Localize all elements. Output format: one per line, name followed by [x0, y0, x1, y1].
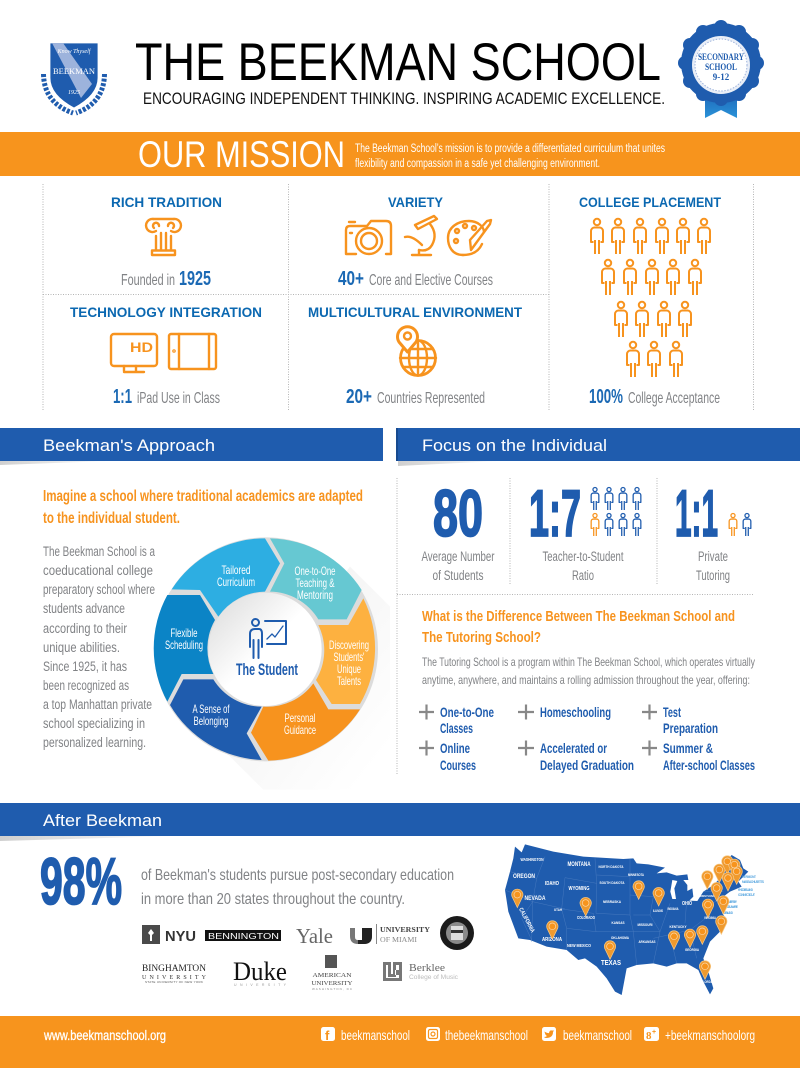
- approach body text: coeducational college: [43, 563, 153, 578]
- state labels: NEBRASKA: [603, 899, 621, 904]
- approach heading: to the individual student.: [43, 510, 180, 527]
- segment: personal guidance: [251, 683, 360, 761]
- state labels: [513, 857, 718, 984]
- panel: rich tradition: 1925: [179, 268, 211, 290]
- social: facebook: f: [325, 1028, 330, 1043]
- approach body text: according to their: [43, 621, 127, 636]
- list of offerings: After-school Classes: [663, 757, 755, 773]
- state labels: ARIZONA: [542, 937, 562, 943]
- state labels: NORTH DAKOTA: [598, 864, 624, 869]
- social: instagram: [426, 1027, 528, 1043]
- approach heading: [43, 488, 363, 527]
- icon: two people: [729, 514, 751, 536]
- state labels: NEW MEXICO: [567, 943, 591, 948]
- panel: variety: [338, 194, 493, 290]
- panel: college placement: COLLEGE PLACEMENT: [579, 194, 721, 210]
- segment: one-to-one: [270, 538, 362, 619]
- northeast state labels: MASSACHUSETTS: [742, 880, 764, 884]
- plus icons: [419, 704, 657, 756]
- badge: secondary school: SECONDARY: [698, 52, 744, 62]
- state labels: MISSOURI: [638, 922, 652, 927]
- after beekman text: in more than 20 states throughout the country.: [141, 891, 405, 908]
- stat: private tutoring: 1:1: [675, 476, 718, 550]
- stat: average students: [422, 476, 495, 583]
- after beekman text: [141, 867, 454, 908]
- icon: globe with pin: [398, 327, 436, 376]
- stat: teacher to student ratio: Teacher-to-Student: [542, 549, 624, 564]
- social: google plus: +beekmanschoolorg: [665, 1027, 755, 1043]
- approach body text: preparatory school where: [43, 582, 155, 597]
- footer: [0, 1016, 800, 1068]
- list of offerings: [419, 704, 755, 773]
- mission heading: OUR MISSION: [138, 133, 345, 175]
- northeast state labels: RHODE ISLAND: [738, 888, 754, 892]
- logo: Berklee: Berklee: [409, 963, 446, 974]
- wheel labels: Unique: [337, 662, 361, 676]
- state labels: SOUTH DAKOTA: [600, 880, 625, 885]
- state labels: OKLAHOMA: [611, 935, 629, 940]
- list of offerings: One-to-One: [440, 704, 494, 720]
- approach body text: students advance: [43, 601, 125, 616]
- list of offerings: Test: [663, 704, 681, 720]
- icon: camera: [346, 221, 391, 254]
- stat: average students: 80: [433, 476, 483, 550]
- state labels: OHIO: [682, 901, 692, 907]
- section header: Beekman's Approach: [0, 428, 383, 465]
- badge: secondary school: [678, 20, 764, 118]
- panel: rich tradition: Founded in: [121, 272, 175, 289]
- state labels: WASHINGTON: [520, 857, 544, 862]
- wheel labels: Mentoring: [297, 588, 333, 602]
- state labels: KENTUCKY: [670, 924, 687, 929]
- list of offerings: Accelerated or: [540, 740, 607, 756]
- icon: tablet: [169, 334, 216, 369]
- approach body text: a top Manhattan private: [43, 697, 152, 712]
- wheel labels: One-to-One: [294, 564, 336, 578]
- logo: University of Miami: [350, 924, 430, 944]
- mission text: [355, 143, 665, 170]
- section header: Beekman's Approach: Beekman's Approach: [43, 436, 215, 455]
- northeast state labels: DELAWARE: [727, 905, 738, 909]
- logo: Berklee: [383, 962, 458, 981]
- mission text: The Beekman School’s mission is to provide a differentiated curriculum that unites: [355, 143, 665, 155]
- state labels: CALIFORNIA: [517, 907, 535, 934]
- difference heading: [422, 608, 735, 646]
- state labels: PENNSYLVANIA: [697, 894, 718, 898]
- tagline: ENCOURAGING INDEPENDENT THINKING. INSPIRING ACADEMIC EXCELLENCE.: [143, 89, 665, 108]
- logo: American University: [312, 955, 353, 991]
- social: twitter: beekmanschool: [563, 1027, 632, 1043]
- wheel labels: [165, 563, 369, 737]
- section header: Focus on the Individual: Focus on the Individual: [422, 436, 607, 455]
- panel: rich tradition: [111, 194, 222, 290]
- wheel labels: Curriculum: [217, 575, 255, 589]
- northeast state labels: VERMONT: [742, 875, 756, 879]
- panel: multicultural environment: Countries Represented: [377, 390, 485, 407]
- social: facebook: [321, 1027, 410, 1043]
- section header: Focus on the Individual: [396, 428, 800, 466]
- stat: 98 percent: 98%: [40, 844, 122, 918]
- panel: variety: Core and Elective Courses: [369, 272, 493, 289]
- logo: American University: UNIVERSITY: [312, 980, 353, 987]
- map pins: [512, 856, 742, 979]
- social: twitter: [542, 1027, 632, 1043]
- list of offerings: Classes: [440, 720, 473, 736]
- wheel labels: Discovering: [329, 638, 369, 652]
- northeast state labels: [722, 875, 764, 915]
- stat: average students: of Students: [432, 568, 484, 583]
- approach body text: personalized learning.: [43, 735, 146, 750]
- state labels: FLORIDA: [702, 980, 713, 984]
- section header: After Beekman: After Beekman: [43, 811, 162, 830]
- panel: technology integration: iPad Use in Class: [137, 390, 220, 407]
- logo: Duke: UNIVERSITY: [234, 983, 287, 987]
- logo: American University: WASHINGTON, DC: [312, 987, 353, 991]
- state labels: ILLINOIS: [653, 909, 663, 913]
- state labels: INDIANA: [668, 907, 679, 911]
- stat: teacher to student ratio: 1:7: [529, 476, 581, 550]
- list of offerings: Summer &: [663, 740, 713, 756]
- icon: HD monitor: HD: [130, 339, 153, 355]
- logo: University of Miami: UNIVERSITY: [380, 926, 430, 934]
- wheel labels: Personal: [284, 711, 316, 725]
- logo: NYU: NYU: [165, 928, 196, 945]
- header: [44, 20, 764, 118]
- northeast state labels: NEW JERSEY: [725, 900, 738, 904]
- approach body text: unique abilities.: [43, 640, 120, 655]
- stat: private tutoring: Tutoring: [696, 568, 730, 583]
- panel: multicultural environment: [308, 304, 522, 408]
- logo: Bennington: BENNINGTON: [208, 931, 279, 941]
- wheel labels: Tailored: [222, 563, 250, 577]
- college logos: [142, 916, 474, 991]
- stat: private tutoring: [675, 476, 751, 583]
- state labels: NEVADA: [524, 895, 546, 902]
- logo: University of Miami: OF MIAMI: [380, 936, 418, 944]
- state labels: IDAHO: [545, 881, 560, 887]
- segment: tailored curriculum: [172, 538, 280, 617]
- northeast state labels: CONNECTICUT: [738, 893, 755, 897]
- center label: The Student: [236, 660, 298, 679]
- map: United States: [505, 844, 764, 995]
- approach body text: Since 1925, it has: [43, 659, 127, 674]
- state labels: UTAH: [554, 907, 562, 912]
- logo: Berklee: College of Music: [409, 975, 458, 981]
- wheel labels: Guidance: [284, 723, 316, 737]
- state labels: VIRGINIA: [704, 916, 716, 920]
- logo: Binghamton: [142, 964, 207, 984]
- panel: variety: VARIETY: [388, 194, 444, 210]
- mission band: [0, 132, 800, 176]
- wheel labels: Talents: [337, 674, 361, 688]
- school crest logo: [44, 43, 104, 113]
- logo: NYU: [142, 925, 196, 945]
- after beekman text: of Beekman's students pursue post-secondary education: [141, 867, 454, 884]
- icon: HD monitor: [111, 334, 157, 372]
- section header: After Beekman: [0, 803, 800, 841]
- panel: technology integration: TECHNOLOGY INTEGRATION: [70, 304, 262, 320]
- social: google plus: [644, 1027, 755, 1043]
- website: www.beekmanschool.org: [43, 1027, 166, 1043]
- icon: student at board: [250, 619, 286, 658]
- icon: microscope: [405, 216, 437, 255]
- title: THE BEEKMAN SCHOOL: [135, 33, 661, 92]
- wheel labels: A Sense of: [192, 702, 230, 716]
- social: facebook: beekmanschool: [341, 1027, 410, 1043]
- panel: college placement: 100%: [589, 386, 623, 408]
- icon: eight people: [591, 488, 641, 536]
- list of offerings: Preparation: [663, 720, 718, 736]
- state labels: TEXAS: [601, 958, 621, 967]
- badge: secondary school: SCHOOL: [705, 62, 737, 72]
- school crest logo: 1925: [68, 90, 80, 96]
- difference paragraph: [422, 655, 755, 687]
- icon: ionic column: [146, 219, 181, 255]
- panel: college placement: College Acceptance: [628, 390, 720, 407]
- list of offerings: Online: [440, 740, 470, 756]
- logo: Yale: Yale: [296, 924, 333, 948]
- school crest logo: Know Thyself: [57, 48, 92, 55]
- state labels: MONTANA: [568, 862, 591, 868]
- approach body text: school specializing in: [43, 716, 145, 731]
- approach body text: been recognized as: [43, 678, 129, 693]
- logo: Duke: Duke: [233, 957, 287, 986]
- logo: Binghamton: UNIVERSITY: [142, 975, 207, 981]
- icon group: people pyramid: [591, 219, 710, 377]
- wheel labels: Teaching &: [296, 576, 334, 590]
- social: google plus: 8: [646, 1030, 652, 1042]
- stat: teacher to student ratio: Ratio: [572, 568, 594, 583]
- panel: college placement: [579, 194, 721, 408]
- wheel labels: Flexible: [170, 626, 198, 640]
- mission text: flexibility and compassion in a safe yet challenging environment.: [355, 158, 600, 170]
- state labels: GEORGIA: [685, 947, 699, 952]
- chart: the student wheel: [154, 537, 390, 790]
- panel: technology integration: 1:1: [113, 386, 132, 408]
- stat: private tutoring: Private: [698, 549, 728, 564]
- wheel labels: Scheduling: [165, 638, 203, 652]
- approach body text: [43, 544, 155, 750]
- social: google plus: +: [652, 1029, 656, 1036]
- state labels: ARKANSAS: [638, 940, 656, 944]
- difference heading: The Tutoring School?: [422, 629, 541, 646]
- panel: rich tradition: RICH TRADITION: [111, 194, 222, 210]
- approach body text: The Beekman School is a: [43, 544, 155, 559]
- northeast state labels: MARYLAND: [722, 911, 734, 915]
- stat: teacher to student ratio: [529, 476, 641, 583]
- panel: variety: 40+: [338, 268, 364, 290]
- social: instagram: thebeekmanschool: [445, 1027, 528, 1043]
- wheel labels: Students': [334, 650, 364, 664]
- segment: flexible scheduling: [154, 595, 215, 702]
- list of offerings: Courses: [440, 757, 476, 773]
- approach heading: Imagine a school where traditional academics are adapted: [43, 488, 363, 505]
- segment: sense of belonging: [170, 679, 262, 760]
- panel: technology integration: [70, 304, 262, 408]
- state labels: MINNESOTA: [628, 873, 644, 877]
- state labels: KANSAS: [612, 920, 625, 925]
- logo: American University: AMERICAN: [312, 972, 352, 979]
- list of offerings: Delayed Graduation: [540, 757, 634, 773]
- panel: multicultural environment: 20+: [346, 386, 372, 408]
- segment: discovering talents: [316, 598, 375, 704]
- logo: college seal: [440, 916, 474, 950]
- logo: Binghamton: STATE UNIVERSITY OF NEW YORK: [145, 980, 203, 984]
- icon: palette: [448, 220, 491, 255]
- state labels: WYOMING: [568, 886, 590, 892]
- panel: multicultural environment: MULTICULTURAL ENVIRONMENT: [308, 304, 522, 320]
- list of offerings: Homeschooling: [540, 704, 611, 720]
- logo: Binghamton: BINGHAMTON: [142, 964, 206, 974]
- state labels: COLORADO: [577, 915, 595, 920]
- badge: secondary school: 9-12: [713, 72, 730, 82]
- state labels: OREGON: [513, 874, 535, 880]
- wheel labels: Belonging: [194, 714, 228, 728]
- logo: Bennington: [205, 930, 281, 941]
- stat: average students: Average Number: [422, 549, 495, 564]
- school crest logo: BEEKMAN: [53, 66, 95, 76]
